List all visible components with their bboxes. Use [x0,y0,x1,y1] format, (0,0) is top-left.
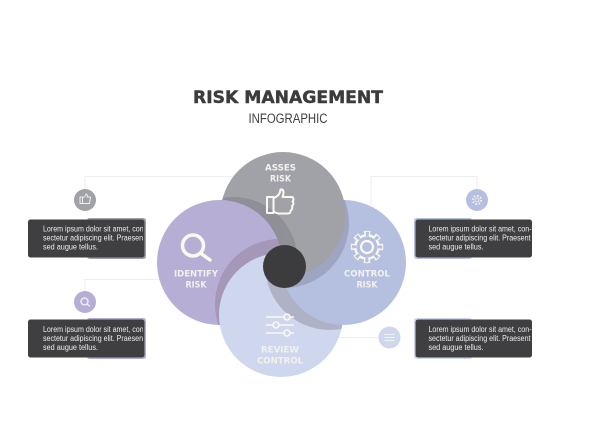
card: bottom left: sectetur adipiscing elit. Praesent [43,334,146,343]
circle: control risk [281,200,406,325]
shadow on control circle [286,200,349,288]
card: bottom left [28,318,146,359]
label: review control [257,346,304,366]
card: top left: Lorem ipsum dolor sit amet, con- [43,224,146,234]
center dark circle [263,245,306,288]
pinwheel diagram [157,152,406,377]
card: top right: sectetur adipiscing elit. Praesent [428,234,531,242]
label: identify risk [174,270,219,290]
card: bottom left: sed augue tellus. [43,343,98,352]
asses circle overlap wedge [284,200,346,273]
label: asses risk [265,164,296,184]
icon: gear [350,230,384,264]
shadow on asses circle [222,197,290,246]
shadow on identify circle [215,239,280,325]
card: top left: sectetur adipiscing elit. Praesent [43,234,146,242]
label: asses risk: ASSES [265,164,296,174]
icon: thumbs up [267,189,293,214]
card: top left [28,218,146,259]
icon: magnifier [182,235,210,260]
label: identify risk: IDENTIFY [174,270,219,280]
connector lines [85,176,477,338]
card: bottom right: sed augue tellus. [428,343,484,352]
circle: asses risk [220,152,346,277]
label: identify risk: RISK [186,280,207,290]
label: review control: CONTROL [257,356,304,366]
card: top left: sed augue tellus. [43,242,98,252]
badge: sliders [378,326,400,348]
card: top right: Lorem ipsum dolor sit amet, con- [428,224,532,234]
circle: review control [219,253,343,377]
title: RISK MANAGEMENT [193,88,384,107]
badge: thumbs up [74,189,96,211]
label: asses risk: RISK [270,174,291,184]
card: bottom right [414,318,532,359]
label: review control: REVIEW [261,346,300,356]
badge: magnifier [74,291,96,313]
card: bottom right: sectetur adipiscing elit. Praesent [428,334,531,343]
badge: gear [466,189,488,211]
card: top right: sed augue tellus. [428,242,484,252]
label: control risk: RISK [356,280,378,290]
card: bottom left: Lorem ipsum dolor sit amet, con- [43,325,146,334]
card: bottom right: Lorem ipsum dolor sit amet, con- [428,325,532,334]
subtitle: INFOGRAPHIC [248,111,328,126]
label: control risk: CONTROL [344,270,391,280]
icon: sliders [266,314,294,336]
circle: identify risk [157,200,282,325]
card: top right [414,218,532,259]
shadow on review circle [266,255,342,330]
label: control risk [344,270,391,290]
